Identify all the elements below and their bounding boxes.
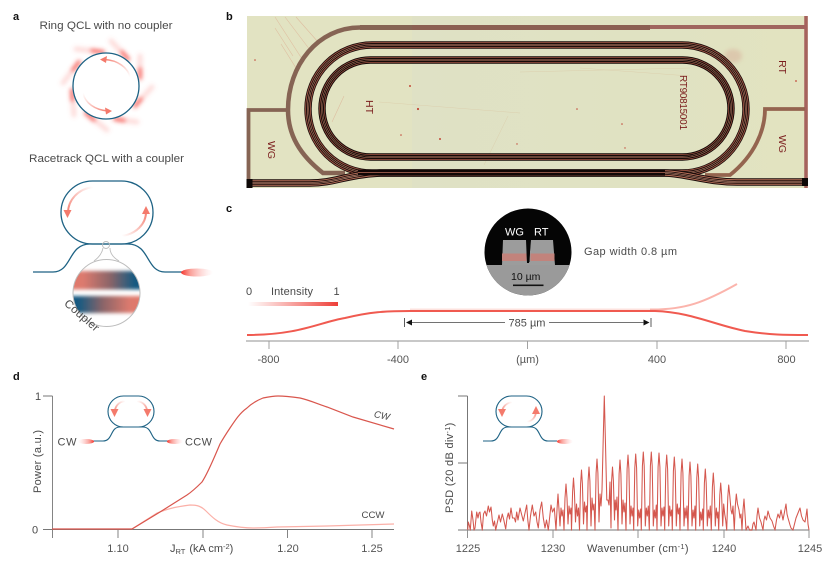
SEM cross-section inset: 10 µm bbox=[511, 271, 541, 283]
label e: e bbox=[421, 371, 427, 383]
inset: racetrack with both outputs: CCW bbox=[185, 436, 213, 448]
position axis: 800 bbox=[777, 354, 796, 366]
axes: ) bbox=[444, 422, 456, 426]
chip photograph bbox=[246, 16, 808, 188]
racetrack arrow: right bbox=[122, 206, 150, 236]
label d: d bbox=[13, 371, 20, 383]
beam: upper fading branch bbox=[410, 284, 737, 310]
bus waveguide electrodes bbox=[246, 172, 808, 188]
CW curve bbox=[52, 396, 394, 529]
label b: b bbox=[226, 11, 233, 23]
position axis: -400 bbox=[387, 354, 409, 366]
axes: 0 bbox=[32, 524, 38, 536]
output glow bbox=[181, 268, 213, 276]
coupler label: Coupler bbox=[62, 298, 101, 334]
axes: Wavenumber (cm bbox=[587, 543, 678, 555]
inset: racetrack with one output bbox=[483, 396, 573, 444]
axes: 1225 bbox=[456, 543, 480, 555]
axes: PSD (20 dB div bbox=[444, 434, 456, 513]
surface specks bbox=[254, 59, 797, 149]
position axis: 400 bbox=[648, 354, 666, 366]
axes bbox=[443, 396, 822, 555]
axes: ) bbox=[685, 543, 689, 555]
position axis: (µm) bbox=[516, 354, 539, 366]
label c: c bbox=[226, 203, 232, 215]
chip text labels: WG bbox=[776, 135, 788, 153]
axes: 1245 bbox=[798, 543, 822, 555]
chip text labels: RT90815001 bbox=[677, 75, 688, 130]
CCW curve bbox=[132, 505, 394, 529]
position axis: -800 bbox=[257, 354, 280, 366]
scale bar bbox=[513, 284, 544, 286]
inset: racetrack with both outputs bbox=[58, 396, 213, 448]
panel d: power versus current density bbox=[13, 371, 394, 556]
ring waveguide bbox=[73, 53, 139, 119]
heading: racetrack QCL: Racetrack QCL with a coupler bbox=[29, 153, 184, 165]
axes: 1 bbox=[35, 391, 41, 403]
inset: racetrack with both outputs: CW bbox=[58, 436, 77, 448]
panel b: microscope image bbox=[226, 11, 808, 188]
chip text labels: RT bbox=[776, 60, 788, 74]
racetrack waveguide bbox=[61, 181, 153, 244]
chip text labels: WG bbox=[265, 141, 277, 159]
chip text labels bbox=[265, 60, 788, 159]
intensity colour bar: 0 bbox=[246, 286, 252, 298]
intensity colour bar: 1 bbox=[334, 286, 340, 298]
surface scratches bbox=[275, 17, 344, 122]
ring arrow: bottom bbox=[83, 93, 112, 114]
axes: -1 bbox=[678, 542, 685, 551]
SEM cross-section inset: RT bbox=[534, 226, 549, 238]
contact pad outlines bbox=[248, 16, 806, 188]
axes: 1.10 bbox=[107, 543, 129, 555]
racetrack arrow: left bbox=[64, 187, 93, 218]
axes: 1.25 bbox=[361, 543, 383, 555]
intensity colour bar: Intensity bbox=[271, 286, 314, 298]
CCW label: CCW bbox=[362, 510, 385, 521]
axes: J bbox=[170, 543, 176, 555]
SEM labels: WG bbox=[505, 226, 524, 238]
axes: ) bbox=[230, 543, 233, 555]
axes: (kA cm bbox=[189, 543, 223, 555]
bus waveguide bbox=[33, 244, 182, 272]
intensity colour bar bbox=[246, 286, 340, 306]
panel e: power spectrum bbox=[421, 371, 822, 555]
label a: a bbox=[13, 11, 20, 23]
axes: 1240 bbox=[712, 543, 736, 555]
axes: 1230 bbox=[541, 543, 565, 555]
coupler mode field bbox=[72, 259, 140, 327]
axes: RT bbox=[176, 547, 186, 556]
ring arrow: top bbox=[100, 56, 130, 77]
CW label: CW bbox=[373, 409, 392, 423]
SEM cross-section inset bbox=[484, 208, 572, 300]
coupler magnifier neck bbox=[94, 242, 119, 261]
position axis bbox=[246, 341, 809, 366]
beam: main path bbox=[247, 311, 808, 335]
ring emission glows bbox=[63, 41, 152, 130]
axes: -2 bbox=[223, 542, 230, 551]
gap width note: Gap width 0.8 µm bbox=[584, 246, 677, 258]
panel a: ring and racetrack schematics bbox=[13, 11, 213, 334]
chip text labels: HT bbox=[363, 100, 375, 115]
coupler length dimension bbox=[404, 318, 651, 330]
axes bbox=[32, 391, 394, 556]
coupler length dimension: 785 µm bbox=[509, 318, 545, 330]
heading: ring QCL: Ring QCL with no coupler bbox=[40, 20, 173, 32]
axes: Power (a.u.) bbox=[32, 430, 44, 493]
spectrum trace bbox=[468, 396, 809, 530]
axes: 1.20 bbox=[277, 543, 299, 555]
axes: -1 bbox=[443, 426, 452, 434]
racetrack ring electrodes bbox=[308, 45, 746, 173]
panel c: coupler simulation bbox=[226, 203, 809, 366]
